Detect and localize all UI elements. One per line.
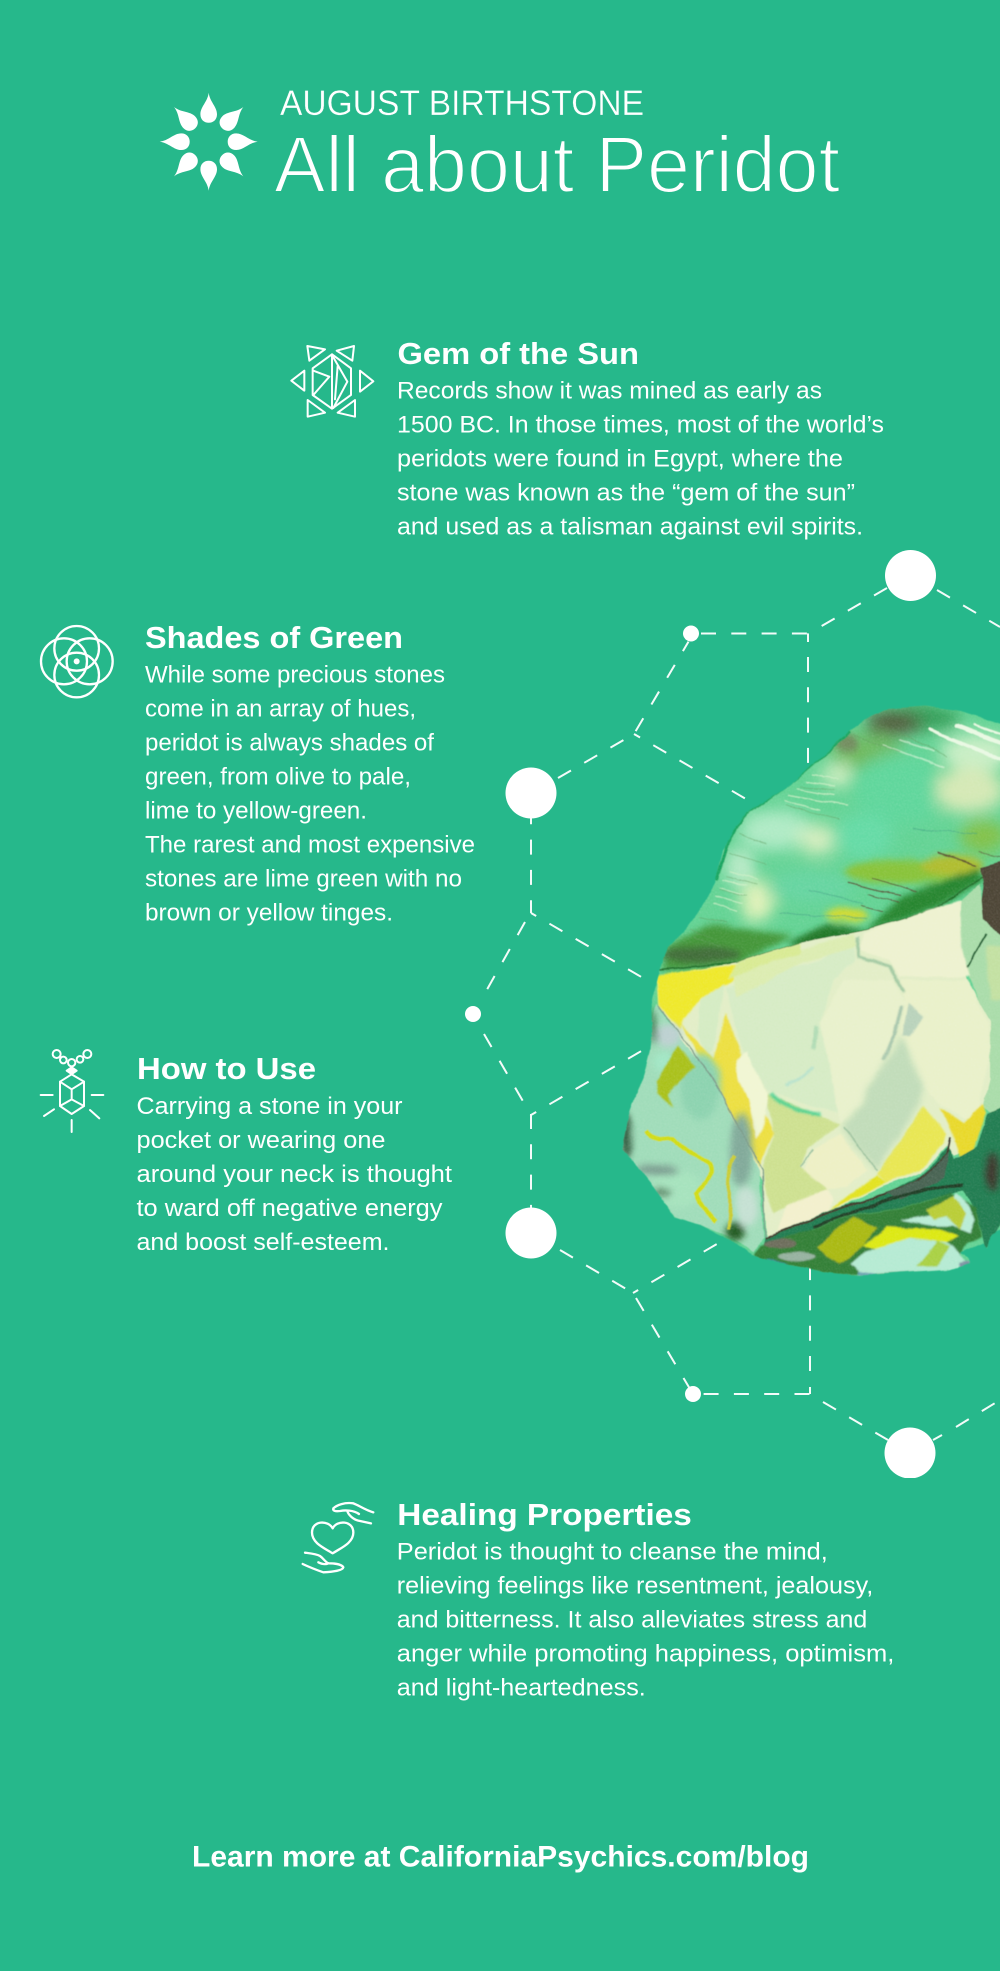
footer call to action: Learn more at CaliforniaPsychics.com/blog	[192, 1841, 809, 1874]
body text: Peridot is thought to cleanse the mind,	[397, 1538, 828, 1565]
body text	[397, 1538, 894, 1701]
body text	[136, 1093, 452, 1256]
body text: Carrying a stone in your	[136, 1093, 402, 1120]
body text	[145, 661, 475, 926]
body text: peridot is always shades of	[145, 729, 434, 756]
panel: Shades of Green	[41, 620, 475, 926]
ridge line	[660, 877, 983, 970]
title block	[160, 84, 840, 209]
body text: to ward off negative energy	[136, 1195, 442, 1222]
paper grain	[623, 706, 1000, 1276]
dashed constellation network	[465, 550, 1000, 1478]
body text: and used as a talisman against evil spirits.	[397, 513, 863, 540]
heading: Gem of the Sun	[398, 336, 639, 371]
right dark wedge	[980, 860, 1000, 940]
lower stone facets	[618, 883, 1000, 1277]
heading: Healing Properties	[397, 1497, 692, 1532]
body text: relieving feelings like resentment, jealousy,	[397, 1572, 873, 1599]
body text: and boost self-esteem.	[136, 1229, 390, 1256]
streak marks	[690, 725, 1000, 947]
body text: Records show it was mined as early as	[397, 377, 822, 404]
heading: Shades of Green	[145, 620, 403, 655]
body text: 1500 BC. In those times, most of the world’s	[397, 411, 884, 438]
body text: While some precious stones	[145, 661, 445, 688]
illustration: watercolor peridot stone	[622, 705, 1000, 1276]
icon: geometric gem with triangles	[291, 346, 373, 417]
panel: Gem of the Sun	[291, 336, 884, 540]
lower-left pale teal facet	[618, 1003, 765, 1252]
body text: brown or yellow tinges.	[145, 899, 393, 926]
icon: hands holding heart	[303, 1503, 373, 1572]
pale cell shading	[727, 900, 990, 1123]
body text	[397, 377, 884, 540]
panel: Healing Properties	[303, 1497, 894, 1701]
body text: peridots were found in Egypt, where the	[397, 445, 843, 472]
body text: stones are lime green with no	[145, 865, 462, 892]
body text: green, from olive to pale,	[145, 763, 411, 790]
icon: overlapping circles with eye	[41, 626, 113, 697]
body text: stone was known as the “gem of the sun”	[397, 479, 855, 506]
upper green facet	[660, 705, 1000, 972]
yellow washes	[657, 943, 987, 1233]
node circles	[465, 550, 936, 1478]
body text: around your neck is thought	[136, 1161, 452, 1188]
heading: How to Use	[137, 1051, 316, 1086]
right rim facet	[958, 883, 1000, 1120]
body text: come in an array of hues,	[145, 695, 416, 722]
icon: crystal pendant necklace	[41, 1050, 103, 1132]
body text: and bitterness. It also alleviates stress and	[397, 1606, 867, 1633]
panel: How to Use	[41, 1050, 452, 1256]
body text: The rarest and most expensive	[145, 831, 475, 858]
bottom strip	[753, 1193, 982, 1277]
body text: and light-heartedness.	[397, 1674, 646, 1701]
body text: pocket or wearing one	[136, 1127, 386, 1154]
icon: sun of eight teardrop petals	[160, 93, 258, 191]
main pale facet	[657, 900, 990, 1237]
subtitle: AUGUST BIRTHSTONE	[280, 84, 644, 123]
body text: anger while promoting happiness, optimism,	[397, 1640, 894, 1667]
body text: lime to yellow-green.	[145, 797, 367, 824]
main title: All about Peridot	[274, 120, 840, 209]
dark green lower band	[763, 1107, 1000, 1250]
green rim	[717, 732, 850, 880]
